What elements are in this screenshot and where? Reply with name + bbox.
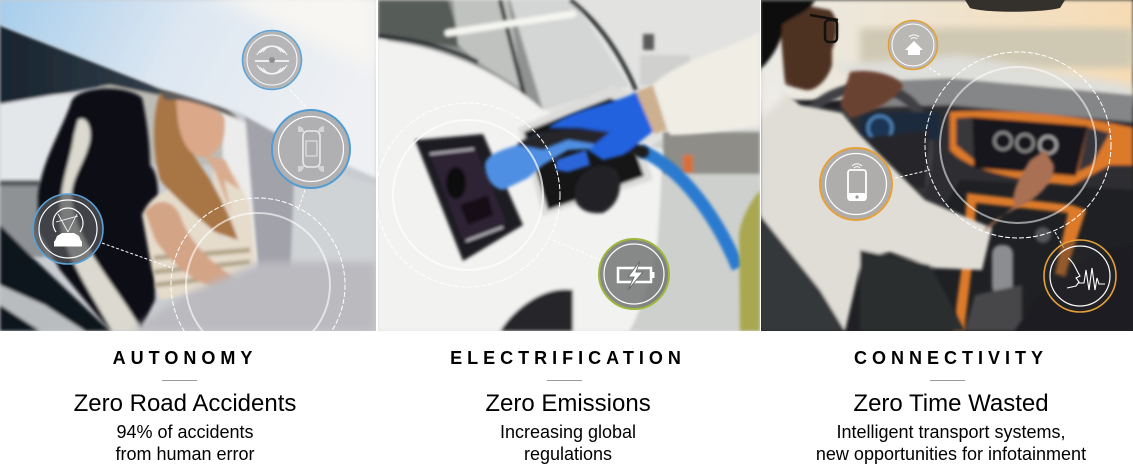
panel: connectivity photo [761,0,1133,331]
decorative rings [376,103,560,287]
icon: voice assistant [1044,240,1116,312]
heading: electrification: ELECTRIFICATION [450,348,686,368]
decorative rings [925,52,1111,238]
text: regulations: regulations [524,444,612,464]
text: accident stat: 94% of accidents [116,422,254,442]
driver [760,0,1054,331]
icon: car with sensors [272,110,350,188]
text: infotainment [816,422,1086,464]
icon: sensor waves [242,30,302,90]
subheading: zero emissions: Zero Emissions [485,390,651,417]
glasses [810,15,838,42]
column: electrification text [450,348,686,464]
icon: smartphone [820,148,892,220]
column: connectivity text [816,348,1086,464]
heading: connectivity: CONNECTIVITY [854,348,1048,368]
seat [38,88,158,331]
heading: autonomy: AUTONOMY [113,348,257,368]
panel: autonomy photo [0,0,376,331]
text: accident stat [115,422,255,464]
icon: car and globe [33,194,103,264]
decorative rings [171,198,345,372]
icon: battery charging [599,239,669,309]
charging port [415,134,523,261]
text: infotainment: Intelligent transport systems, [836,422,1066,442]
panel: electrification photo [378,0,760,331]
subheading: zero time wasted: Zero Time Wasted [853,390,1049,417]
mirror [965,0,1065,12]
sky band and foreground [0,0,376,178]
text: infotainment: new opportunities for infotainment [816,444,1086,464]
text: regulations [500,422,636,464]
text: regulations: Increasing global [500,422,636,442]
column: autonomy text [74,348,296,464]
steering wheel [805,87,940,190]
woman [142,91,256,300]
subheading: zero road accidents: Zero Road Accidents [74,390,296,417]
hose [640,150,738,268]
icon: smart home [888,20,938,70]
text: accident stat: from human error [115,444,255,464]
charging connector [485,32,760,213]
